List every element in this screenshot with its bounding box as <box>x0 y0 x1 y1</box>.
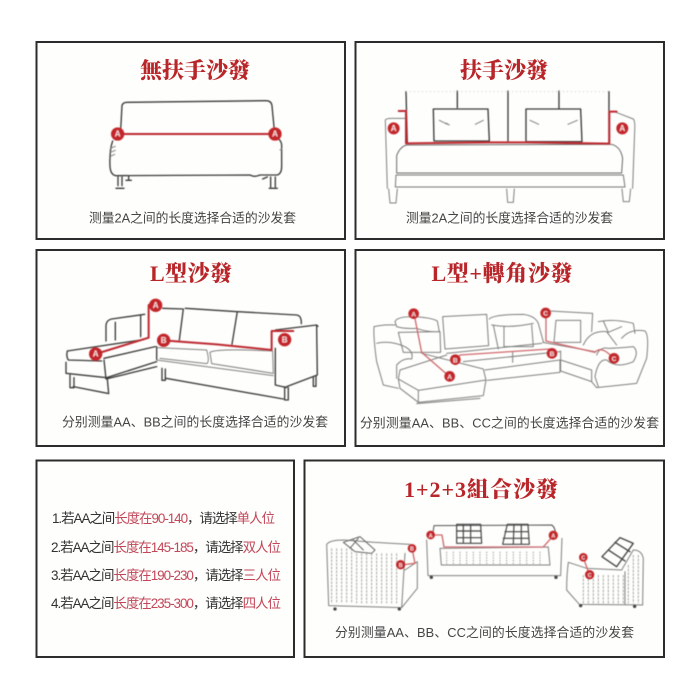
marker: B right: B <box>550 351 555 358</box>
caption: 1+2+3 combination sofa: 分别测量AA、BB、CC之间的长度选择合适的沙发套 <box>335 625 634 640</box>
panel: armless sofa <box>36 42 345 239</box>
marker: A lower: A <box>447 374 452 381</box>
marker: A left <box>388 122 400 134</box>
marker: A upper: A <box>153 301 159 310</box>
illustration: L-shaped plus corner sofa <box>374 308 648 404</box>
illustration: sofa with arms <box>385 91 635 203</box>
marker: A upper <box>149 299 162 312</box>
title: 1+2+3 combination sofa: 1+2+3組合沙發 <box>404 477 558 502</box>
marker: A lower <box>444 371 455 382</box>
caption: armless sofa: 测量2A之间的长度选择合适的沙发套 <box>89 210 296 226</box>
marker: A upper <box>408 308 419 319</box>
marker: A left <box>111 127 124 141</box>
marker: A upper: A <box>411 311 416 318</box>
title: L-shaped plus corner sofa: L型+轉角沙發 <box>432 261 572 286</box>
caption: sofa with arms: 测量2A之间的长度选择合适的沙发套 <box>406 210 613 226</box>
panel: L-shaped sofa <box>36 250 345 446</box>
marker: A lower: A <box>93 350 99 359</box>
marker: C lower: C <box>612 356 617 363</box>
measure lines: AA and BB <box>96 305 156 354</box>
marker: A lower <box>89 347 102 361</box>
marker: A left: A <box>391 124 397 133</box>
title: sofa with arms: 扶手沙發 <box>460 58 548 83</box>
marker: B left: B <box>161 336 167 345</box>
marker: B lower: B <box>399 563 403 569</box>
panel: size guide <box>36 460 294 657</box>
measure lines: AA, BB and CC <box>414 314 449 376</box>
marker: C lower: C <box>588 573 592 579</box>
marker: B left: B <box>453 357 458 364</box>
caption: L-shaped sofa: 分别测量AA、BB之间的长度选择合适的沙发套 <box>62 414 328 430</box>
text: rule 3: 3.若AA之间长度在190-230，请选择三人位 <box>51 568 281 583</box>
text: rule 1: 1.若AA之间长度在90-140，请选择单人位 <box>52 511 275 526</box>
marker: A right <box>268 127 282 141</box>
marker: C upper: C <box>543 311 548 318</box>
marker: C upper <box>540 308 551 318</box>
title: L-shaped sofa: L型沙發 <box>150 261 232 286</box>
marker: A right: A <box>619 124 625 133</box>
title: armless sofa: 無扶手沙發 <box>140 58 250 83</box>
marker: A left: A <box>429 533 433 539</box>
marker: B right <box>278 333 291 346</box>
illustration: single chair right <box>567 538 643 608</box>
marker: A right: A <box>551 534 555 540</box>
measure line: CC <box>583 558 589 574</box>
marker: A right <box>616 122 628 134</box>
marker: B upper: B <box>410 547 414 553</box>
illustration: armless sofa <box>110 101 282 188</box>
marker: A left: A <box>115 130 121 139</box>
panel: sofa with arms <box>356 42 664 239</box>
marker: A right: A <box>272 130 278 139</box>
panel: L-shaped plus corner sofa <box>356 250 664 446</box>
marker: B right: B <box>282 335 288 344</box>
caption: L-shaped plus corner sofa: 分别测量AA、BB、CC之间的长度选择合适的沙发套 <box>360 416 659 430</box>
illustration: single chair left <box>327 537 417 611</box>
text: rule 4: 4.若AA之间长度在235-300，请选择四人位 <box>51 596 281 611</box>
marker: B right <box>547 348 557 359</box>
illustration: L-shaped sofa <box>66 299 318 400</box>
marker: C lower <box>609 353 619 364</box>
text: rule 2: 2.若AA之间长度在145-185，请选择双人位 <box>51 540 281 555</box>
marker: B left <box>157 334 170 347</box>
measure line: AA <box>399 111 617 144</box>
marker: B left <box>450 354 461 365</box>
measure line: AA <box>431 535 553 547</box>
measure line: BB <box>401 548 415 565</box>
illustration: three-seat sofa centre <box>426 524 562 579</box>
panel: 1+2+3 combination sofa <box>304 460 664 657</box>
marker: C upper: C <box>581 556 585 562</box>
measure line: AA <box>118 131 275 137</box>
